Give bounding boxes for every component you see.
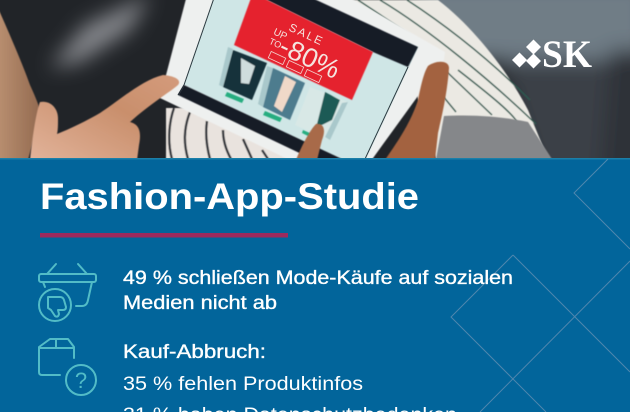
couch highlight	[50, 0, 150, 68]
thumb on screen	[296, 124, 324, 160]
text block: social media statistic	[123, 267, 513, 314]
sale banner: UP	[271, 27, 289, 43]
sale banner: TO	[268, 36, 283, 50]
decorative diamond lines	[451, 159, 630, 412]
sale banner: -80%	[275, 31, 345, 85]
thumb right hand	[385, 62, 449, 160]
tablet body	[160, 0, 445, 165]
icon: box with question mark: ?	[75, 368, 87, 393]
grey fabric background right	[420, 0, 630, 180]
tablet dark bars	[178, 0, 418, 159]
icon: box with question mark	[39, 339, 96, 395]
left arm	[0, 8, 40, 160]
title: Fashion-App-Studie	[40, 175, 419, 217]
title underline	[40, 233, 288, 238]
panel: blue study background	[0, 158, 630, 412]
text block: social media statistic: 49 % schließen Mode-Käufe auf sozialen	[123, 267, 513, 289]
striped shirt	[166, 0, 548, 159]
text block: purchase abandonment	[123, 341, 457, 412]
text block: purchase abandonment: 35 % fehlen Produktinfos	[123, 373, 363, 395]
icon: shopping basket with thumbs down	[39, 264, 96, 321]
sale banner	[234, 0, 373, 100]
grey sleeve	[436, 115, 552, 159]
text block: purchase abandonment: Kauf-Abbruch:	[123, 341, 266, 363]
tablet screen	[184, 0, 418, 159]
photo: hands holding tablet	[0, 0, 630, 158]
pointing hand	[30, 75, 179, 160]
tablet screen edge	[178, 0, 408, 159]
sale banner: SALE	[287, 22, 326, 49]
text block: social media statistic: Medien nicht ab	[123, 292, 277, 314]
product cards	[219, 47, 348, 140]
logo: SK: SK	[542, 33, 593, 76]
logo: SK	[512, 40, 592, 68]
